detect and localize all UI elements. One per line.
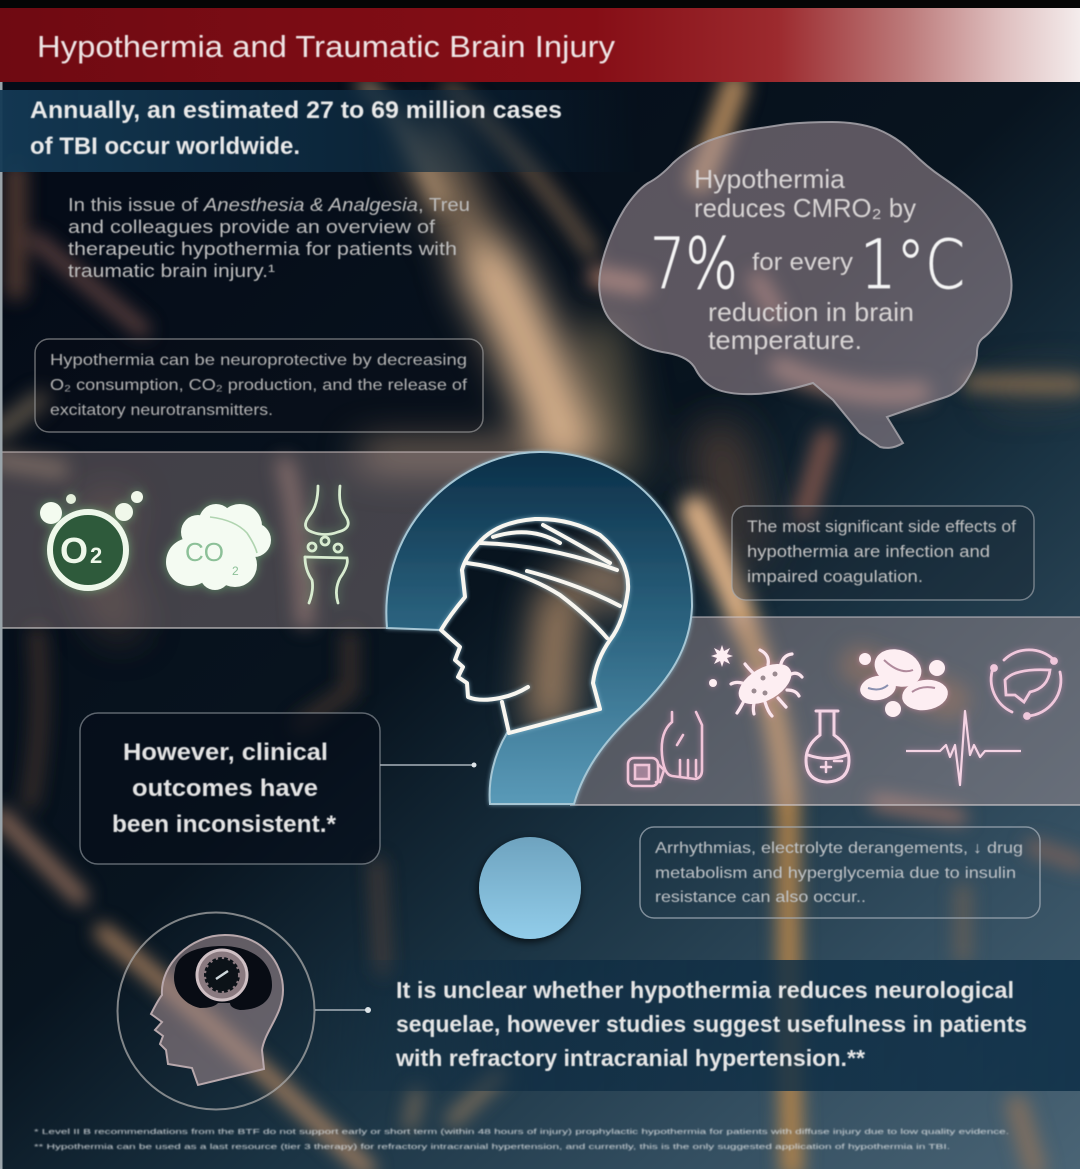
callout: neuroprotective mechanism: Hypothermia can be neuroprotective by decreasing	[50, 352, 467, 369]
icon: carbon dioxide cloud	[166, 504, 271, 590]
question mark with head cut-out	[386, 452, 692, 804]
callout: other complications	[640, 827, 1040, 918]
callout: side effects: hypothermia are infection and	[747, 542, 990, 561]
icon: heartbeat trace	[906, 711, 1021, 785]
question mark dot	[479, 837, 581, 939]
footnotes: * Level II B recommendations from the BTF do not support early or short term (within 48 hours of injury) prophylactic hypothermia for patients with diffuse injury due to low quality evidence.	[34, 1127, 1009, 1136]
callout: inconsistent outcomes: been inconsistent.*	[112, 811, 337, 838]
footnotes: ** Hypothermia can be used as a last resource (tier 3 therapy) for refractory intracranial hypertension, and currently, this is the only suggested application of hypothermia in TBI.	[34, 1142, 950, 1151]
bottom text band	[300, 960, 1080, 1091]
title: Hypothermia and Traumatic Brain Injury	[37, 29, 616, 64]
intro paragraph: traumatic brain injury.¹	[68, 261, 275, 281]
icon: carbon dioxide cloud: 2	[232, 564, 239, 578]
callout: other complications: metabolism and hyperglycemia due to insulin	[655, 865, 1016, 882]
brain speech bubble: temperature.	[708, 325, 862, 355]
brain speech bubble: for every	[752, 249, 853, 276]
headline statistic: Annually, an estimated 27 to 69 million cases	[30, 97, 562, 124]
intro paragraph: In this issue of Anesthesia & Analgesia , Treu	[68, 195, 470, 215]
icon: hand with pulse oximeter	[628, 712, 702, 786]
icon: carbon dioxide cloud: CO	[185, 537, 224, 567]
icon: red blood cells	[858, 643, 950, 717]
brain speech bubble: 1°C	[860, 226, 965, 305]
intro paragraph: and colleagues provide an overview of	[68, 217, 436, 237]
head outline with bandage	[441, 519, 628, 733]
intro paragraph	[68, 195, 470, 281]
icon: liver with cycle arrows	[991, 650, 1061, 718]
callout: inconsistent outcomes	[80, 713, 380, 864]
callout: neuroprotective mechanism	[35, 339, 483, 432]
conclusion text	[395, 977, 1027, 1071]
brain speech bubble: Hypothermia	[694, 164, 846, 194]
callout: other complications: resistance can also occur..	[655, 889, 866, 906]
right icon band	[555, 616, 1080, 806]
icon: synapse	[305, 486, 348, 603]
brain speech bubble	[599, 122, 1012, 448]
intro paragraph: therapeutic hypothermia for patients with	[68, 239, 457, 259]
left icon band	[0, 451, 530, 629]
headline statistic	[0, 90, 640, 172]
callout: neuroprotective mechanism: O₂ consumption, CO₂ production, and the release of	[50, 377, 468, 394]
callout: other complications: Arrhythmias, electrolyte derangements, ↓ drug	[655, 840, 1023, 857]
header bar	[0, 0, 1080, 82]
page left edge	[0, 82, 2, 1169]
callout: side effects: The most significant side effects of	[747, 517, 1016, 536]
brain speech bubble: reduction in brain	[708, 297, 914, 327]
conclusion text: It is unclear whether hypothermia reduces neurological	[396, 977, 1014, 1003]
icon: oxygen bubbles: 2	[90, 543, 102, 568]
icon: oxygen bubbles: O	[60, 530, 88, 571]
brain speech bubble: 7%	[650, 223, 738, 305]
icon: flask	[806, 711, 849, 782]
conclusion text: with refractory intracranial hypertension.**	[395, 1045, 865, 1071]
icon: head with brain gauge in circle	[118, 912, 314, 1110]
brain speech bubble: reduces CMRO₂ by	[694, 193, 916, 223]
icon: bacteria	[709, 645, 802, 716]
icon: oxygen bubbles	[40, 491, 143, 588]
callout: inconsistent outcomes: outcomes have	[132, 775, 318, 802]
headline statistic: of TBI occur worldwide.	[30, 133, 300, 160]
connector arrow to question mark	[380, 762, 476, 768]
callout: side effects: impaired coagulation.	[747, 567, 923, 586]
connector arrow to conclusion	[315, 1007, 371, 1013]
callout: inconsistent outcomes: However, clinical	[123, 739, 328, 766]
callout: neuroprotective mechanism: excitatory neurotransmitters.	[50, 402, 273, 419]
footnotes	[34, 1127, 1009, 1151]
callout: side effects	[732, 506, 1034, 600]
conclusion text: sequelae, however studies suggest usefulness in patients	[396, 1011, 1027, 1037]
